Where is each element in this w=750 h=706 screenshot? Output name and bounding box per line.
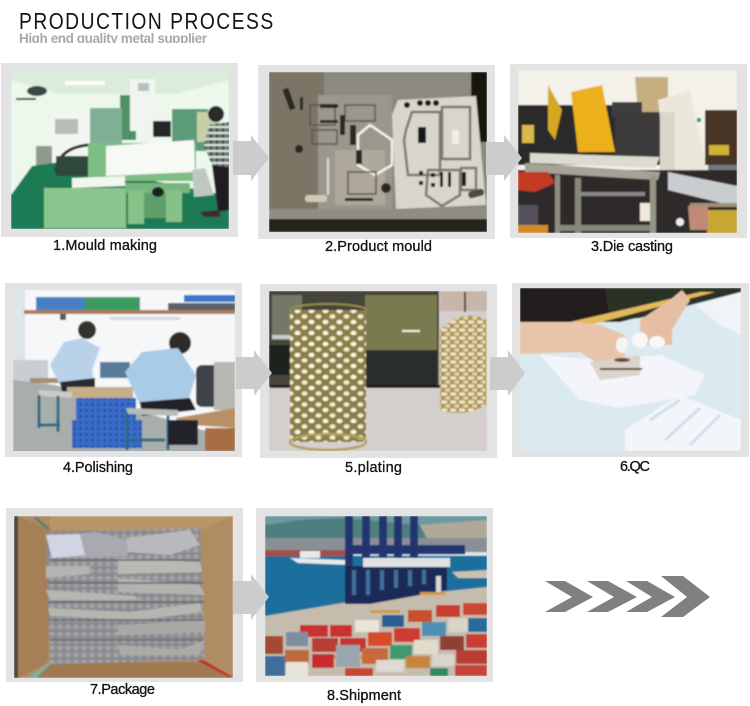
arrow: step 1 to 2 xyxy=(233,135,269,181)
label: 1: 1.Mould making xyxy=(53,238,157,254)
photo: product mould xyxy=(269,72,487,232)
arrow: step 7 to 8 xyxy=(233,574,269,620)
panel: step 3 die casting xyxy=(510,64,747,238)
label: 4: 4.Polishing xyxy=(63,460,133,476)
label: 3: 3.Die casting xyxy=(591,239,673,255)
photo: polishing workers xyxy=(13,290,235,455)
frame xyxy=(5,283,242,457)
panel: step 4 polishing xyxy=(5,283,242,457)
photo: die casting machine xyxy=(518,70,737,233)
panel: step 7 package xyxy=(6,508,243,682)
photo: quality control hands xyxy=(520,288,741,451)
title: PRODUCTION PROCESS xyxy=(19,8,273,34)
photo: plating racks xyxy=(269,291,487,451)
subtitle: High end quality metal supplier xyxy=(19,31,208,46)
frame xyxy=(512,283,749,457)
label: 8: 8.Shipment xyxy=(327,688,401,704)
frame xyxy=(1,63,238,237)
photo: mould making workshop xyxy=(11,70,229,229)
photo: packed carton xyxy=(14,516,233,678)
label: 2: 2.Product mould xyxy=(325,239,432,255)
frame xyxy=(510,64,747,238)
label: 7: 7.Package xyxy=(90,682,155,698)
arrow: step 5 to 6 xyxy=(490,350,525,396)
frame xyxy=(258,65,495,239)
frame xyxy=(260,284,497,458)
arrow: step 4 to 5 xyxy=(236,350,272,396)
panel: step 2 product mould xyxy=(258,65,495,239)
arrow group: chevrons xyxy=(545,576,710,617)
panel: step 6 QC xyxy=(512,283,749,457)
label: 6: 6.QC xyxy=(620,459,650,475)
panel: step 1 mould making xyxy=(1,63,238,237)
label: 5: 5.plating xyxy=(345,460,402,476)
frame xyxy=(256,508,493,682)
arrow: step 2 to 3 xyxy=(486,135,522,181)
panel: step 5 plating xyxy=(260,284,497,458)
photo: container port xyxy=(265,516,487,676)
panel: step 8 shipment xyxy=(256,508,493,682)
frame xyxy=(6,508,243,682)
